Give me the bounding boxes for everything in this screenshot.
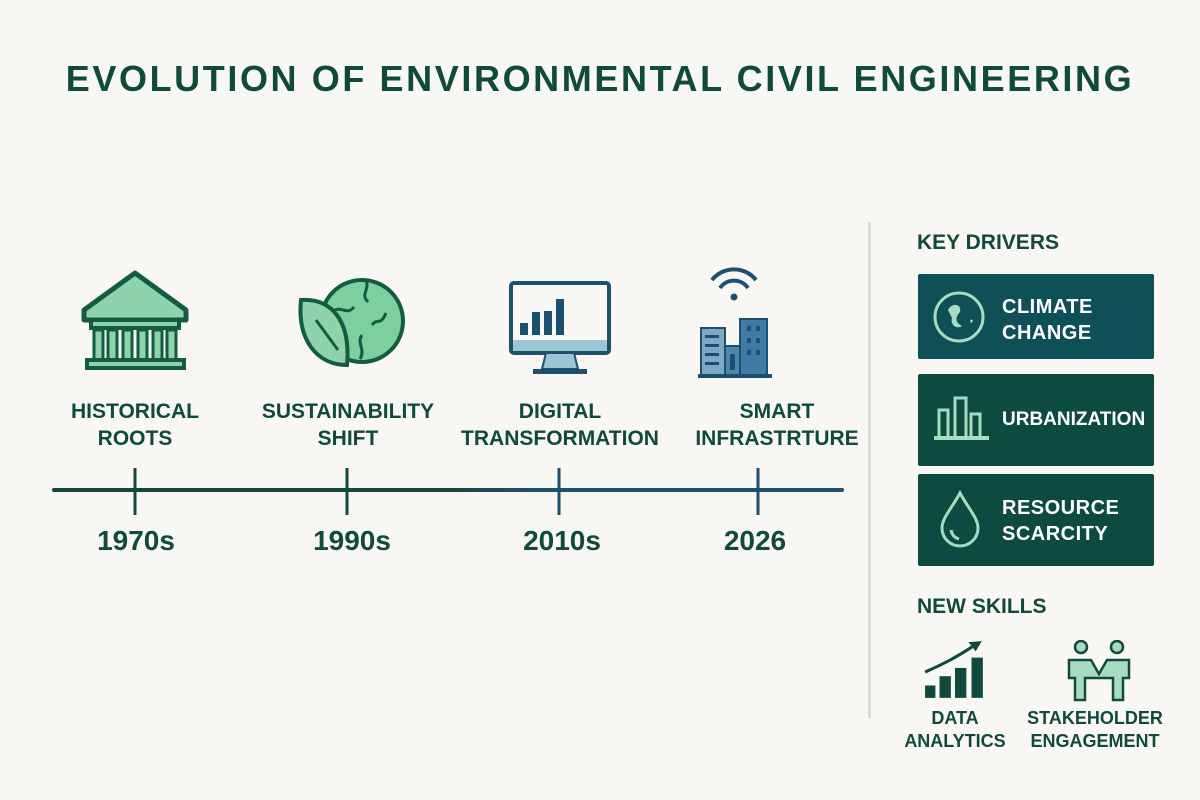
driver: climate change — [918, 274, 1154, 359]
icon: globe leaf — [298, 278, 405, 367]
divider — [868, 222, 871, 718]
skill: data analytics — [904, 641, 1006, 751]
heading: key drivers: KEY DRIVERS — [917, 231, 1059, 254]
heading: new skills: NEW SKILLS — [917, 595, 1046, 618]
skill: data analytics: DATA — [931, 708, 979, 728]
label: smart infrastructure — [695, 400, 859, 450]
label: sustainability shift — [262, 400, 434, 450]
skill: stakeholder engagement: STAKEHOLDER — [1027, 708, 1163, 728]
icon: smart buildings — [698, 267, 772, 378]
year: 1970s: 1970s — [97, 525, 175, 556]
label: digital transformation — [461, 400, 659, 450]
driver: resource scarcity — [918, 474, 1154, 566]
driver: climate change: CHANGE — [1002, 322, 1092, 344]
icon: monitor chart — [509, 281, 611, 374]
driver: resource scarcity: RESOURCE — [1002, 497, 1119, 519]
year: 2026: 2026 — [724, 525, 786, 556]
label: sustainability shift: SHIFT — [318, 427, 378, 450]
driver: urbanization: URBANIZATION — [1002, 409, 1145, 430]
label: smart infrastructure: INFRASTRTURE — [695, 427, 859, 450]
year: 2010s: 2010s — [523, 525, 601, 556]
driver: resource scarcity: SCARCITY — [1002, 523, 1108, 545]
year: 1990s: 1990s — [313, 525, 391, 556]
label: smart infrastructure: SMART — [740, 400, 814, 423]
driver: urbanization — [918, 374, 1154, 466]
label: historical roots: HISTORICAL — [71, 400, 199, 423]
label: digital transformation: TRANSFORMATION — [461, 427, 659, 450]
label: sustainability shift: SUSTAINABILITY — [262, 400, 434, 423]
icon: historical building — [82, 270, 188, 370]
skill: stakeholder engagement — [1027, 640, 1163, 751]
label: historical roots — [71, 400, 199, 450]
label: historical roots: ROOTS — [98, 427, 172, 450]
skill: data analytics: ANALYTICS — [904, 731, 1006, 751]
label: digital transformation: DIGITAL — [519, 400, 601, 423]
driver: climate change: CLIMATE — [1002, 296, 1093, 318]
title: EVOLUTION OF ENVIRONMENTAL CIVIL ENGINEERING — [66, 58, 1134, 99]
skill: stakeholder engagement: ENGAGEMENT — [1030, 731, 1160, 751]
timeline axis — [52, 468, 844, 515]
